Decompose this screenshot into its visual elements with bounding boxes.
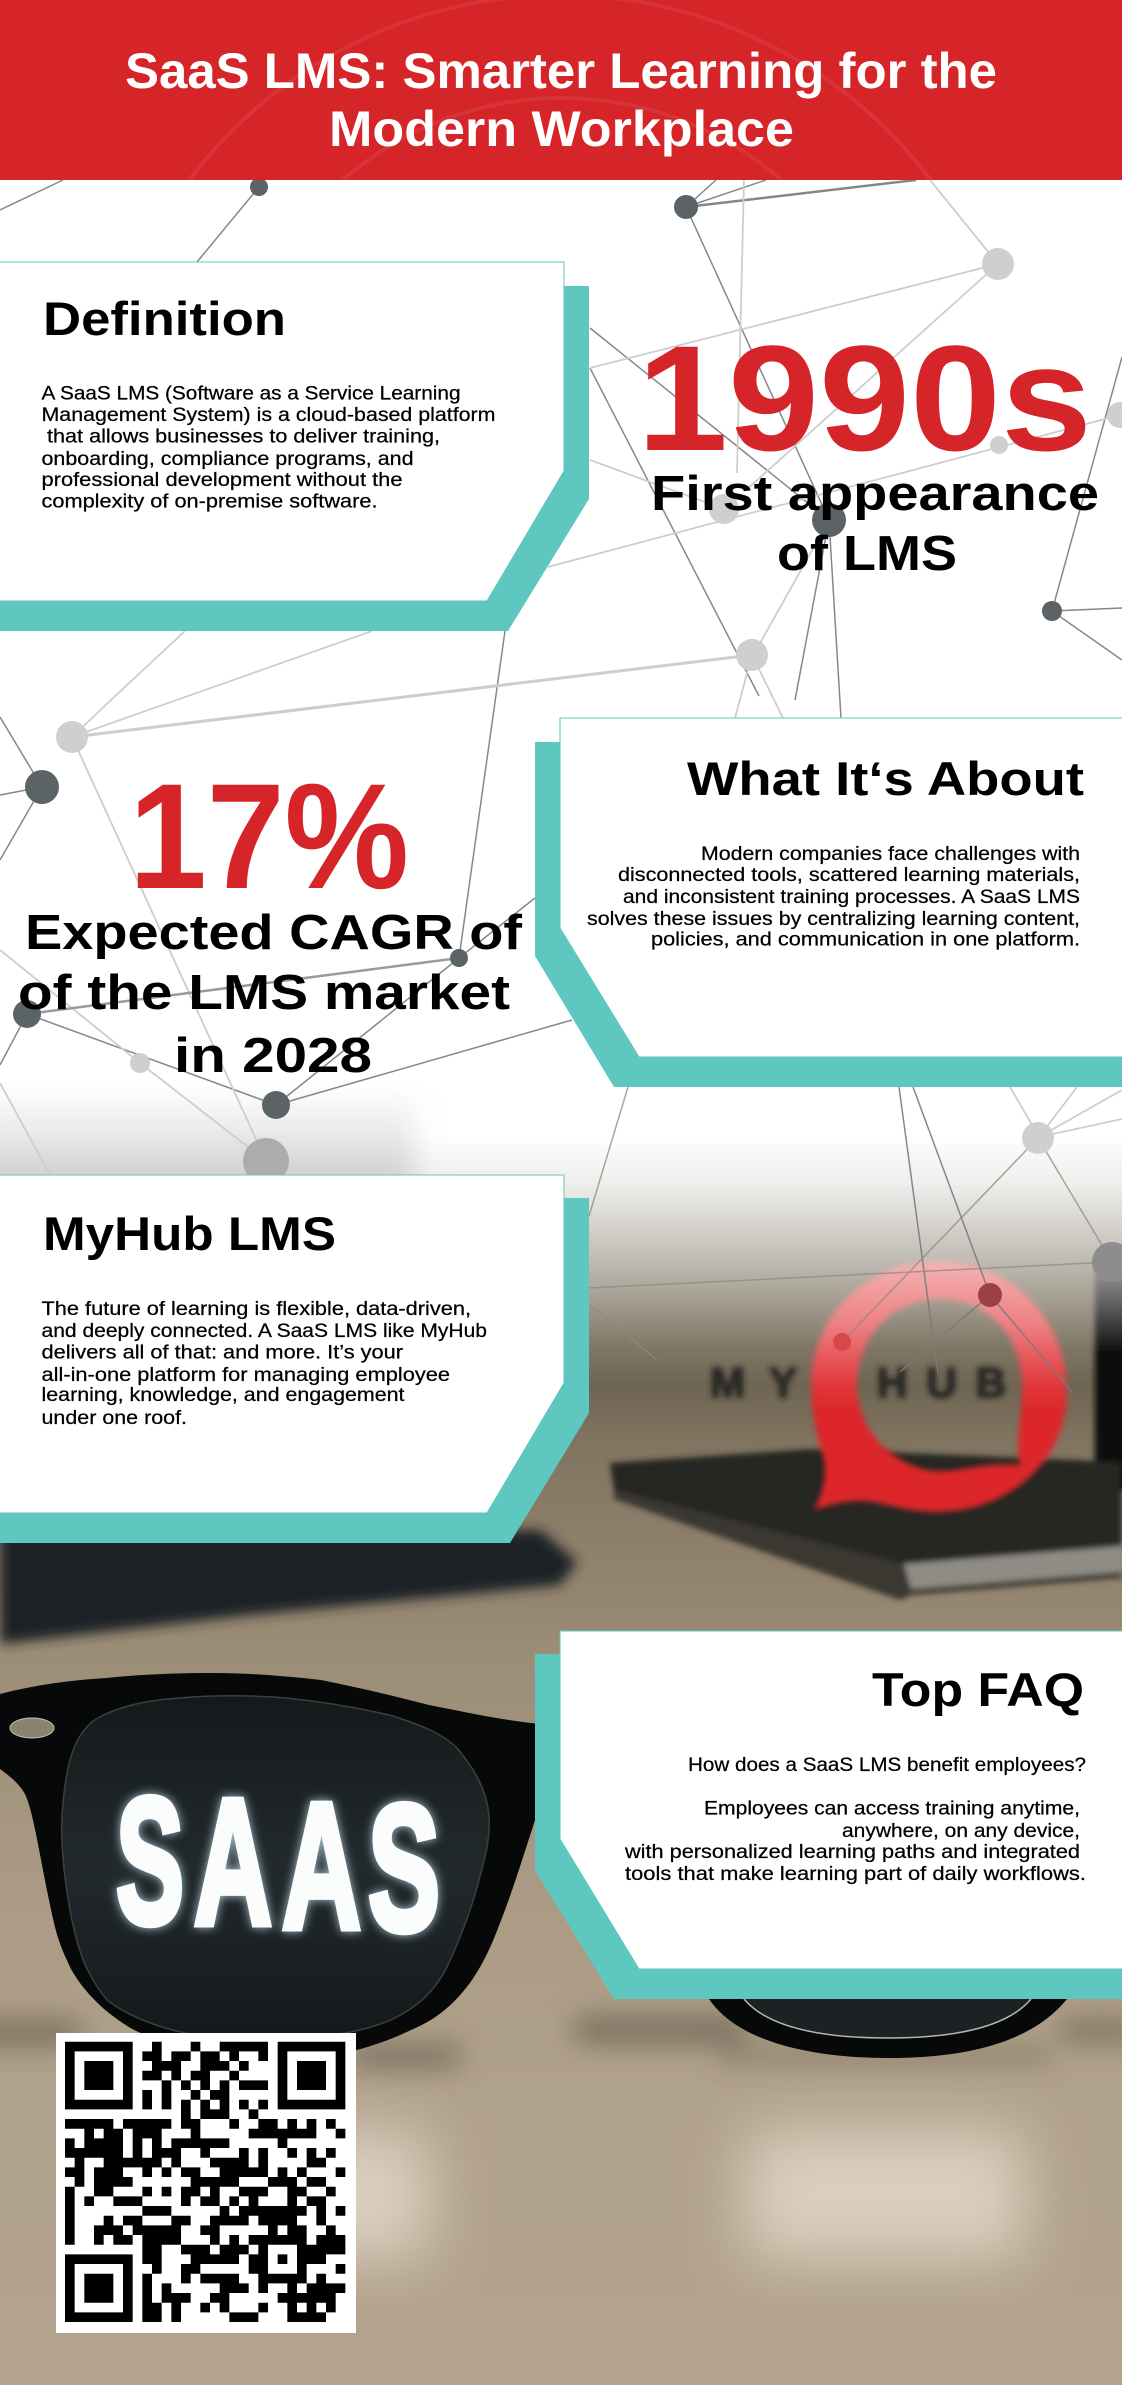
- heading: what it's about: What It‘s About: [687, 752, 1084, 805]
- stat: 17%: [18, 752, 523, 1083]
- heading: myhub lms: MyHub LMS: [43, 1207, 336, 1260]
- network graph background: [0, 178, 1122, 1392]
- stat: 17%: 17%: [129, 752, 409, 920]
- lens text: SAAS: S: [368, 1768, 440, 1969]
- body: what it's about: Modern companies face challenges with: [701, 843, 1080, 865]
- stat: 17%: of the LMS market: [18, 966, 510, 1020]
- body: top faq: [624, 1754, 1086, 1885]
- body: myhub lms: The future of learning is flexible, data-driven,: [42, 1298, 471, 1320]
- body: myhub lms: learning, knowledge, and engagement: [42, 1384, 405, 1406]
- body: top faq: anywhere, on any device,: [842, 1820, 1080, 1842]
- network nodes: [13, 178, 1062, 1119]
- glasses shadow: [0, 2018, 1122, 2066]
- body: what it's about: and inconsistent training processes. A SaaS LMS: [623, 886, 1080, 908]
- qr code: [56, 2033, 356, 2333]
- header banner: [0, 0, 1122, 180]
- stat: 1990s: 1990s: [637, 314, 1092, 482]
- body: what it's about: solves these issues by centralizing learning content,: [587, 908, 1080, 930]
- stat: 1990s: of LMS: [777, 527, 957, 581]
- heading: definition: Definition: [43, 292, 286, 345]
- panel: top faq: [535, 1631, 1122, 1999]
- logo: blurred MyHub speech bubble: [710, 1261, 1067, 1512]
- body: what it's about: [587, 843, 1080, 950]
- keyboard: [0, 1530, 577, 1644]
- title: SaaS LMS: Smarter Learning for the: [125, 43, 997, 99]
- body: what it's about: disconnected tools, scattered learning materials,: [618, 864, 1080, 886]
- heading: top faq: Top FAQ: [872, 1663, 1084, 1716]
- body: top faq: How does a SaaS LMS benefit employees?: [688, 1754, 1086, 1776]
- photo: sunglasses with glowing SAAS: [0, 1673, 1067, 2058]
- stat: 1990s: [637, 314, 1099, 581]
- body: definition: A SaaS LMS (Software as a Service Learning: [42, 382, 460, 404]
- stat: 1990s: First appearance: [651, 467, 1099, 521]
- body: definition: complexity of on-premise software.: [42, 490, 378, 512]
- body: top faq: with personalized learning paths and integrated: [624, 1841, 1080, 1863]
- panel: myhub lms: [0, 1175, 589, 1543]
- panel: definition: [0, 262, 589, 631]
- stat: 17%: Expected CAGR of: [25, 906, 523, 960]
- stat: 17%: in 2028: [174, 1029, 372, 1083]
- body: myhub lms: under one roof.: [42, 1407, 187, 1429]
- logo: blurred MyHub speech bubble: HUB: [877, 1359, 1006, 1406]
- lens text: SAAS: A: [282, 1766, 361, 1967]
- body: definition: Management System) is a cloud-based platform: [42, 404, 496, 426]
- lens text: SAAS: [116, 1761, 440, 1969]
- body: definition: onboarding, compliance programs, and: [42, 448, 413, 470]
- panel: what it's about: [535, 718, 1122, 1087]
- notebook: [610, 1449, 1122, 1600]
- lens text: SAAS: A: [194, 1762, 272, 1963]
- body: myhub lms: and deeply connected. A SaaS LMS like MyHub: [42, 1320, 487, 1342]
- body: definition: that allows businesses to deliver training,: [47, 426, 440, 448]
- body: definition: [42, 382, 496, 512]
- title: Modern Workplace: [329, 101, 794, 157]
- body: top faq: tools that make learning part of daily workflows.: [625, 1863, 1086, 1885]
- body: definition: professional development without the: [42, 469, 402, 491]
- logo: blurred MyHub speech bubble: MY: [710, 1359, 797, 1406]
- body: what it's about: policies, and communication in one platform.: [651, 928, 1080, 950]
- body: myhub lms: all-in-one platform for managing employee: [42, 1364, 450, 1386]
- laptop: [1095, 1250, 1122, 1490]
- title: [125, 43, 997, 157]
- lens text: SAAS: S: [116, 1761, 184, 1962]
- body: myhub lms: [42, 1298, 487, 1429]
- body: top faq: Employees can access training anytime,: [704, 1798, 1080, 1820]
- reflections on desk: [300, 2130, 1025, 2260]
- body: myhub lms: delivers all of that: and more. It’s your: [42, 1342, 404, 1364]
